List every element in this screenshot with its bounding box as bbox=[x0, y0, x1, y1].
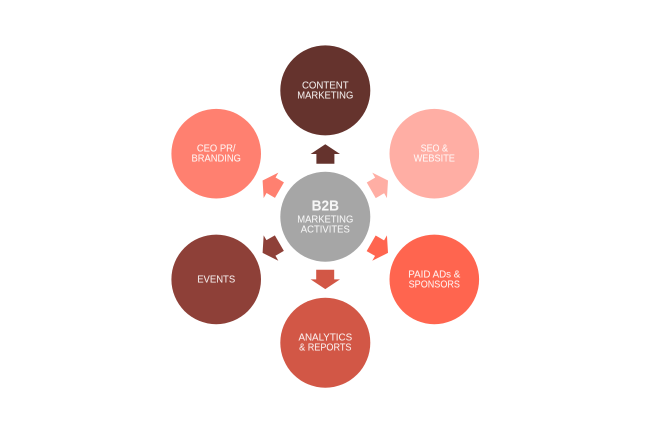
circle: central hub: ACTIVITES bbox=[301, 225, 350, 236]
circle: events bbox=[171, 235, 261, 324]
arrow: to paid ads bbox=[364, 230, 395, 266]
arrow: to SEO and website bbox=[364, 168, 395, 203]
circle: SEO and website: WEBSITE bbox=[414, 154, 455, 165]
circle: analytics and reports: & REPORTS bbox=[299, 342, 352, 353]
circle: central hub bbox=[280, 172, 370, 262]
arrow: to content marketing bbox=[311, 144, 340, 164]
circle: central hub: B2B bbox=[312, 198, 339, 214]
circle: central hub: MARKETING bbox=[297, 215, 354, 226]
circle: CEO PR and branding: CEO PR/ bbox=[197, 144, 236, 155]
circle: content marketing bbox=[280, 45, 370, 135]
arrow: to CEO PR bbox=[255, 168, 287, 203]
circle: analytics and reports: ANALYTICS bbox=[298, 332, 352, 343]
circle: content marketing: MARKETING bbox=[297, 91, 354, 102]
arrow: to events bbox=[255, 230, 287, 266]
arrow: to analytics bbox=[311, 270, 340, 289]
circle: CEO PR and branding bbox=[171, 109, 261, 198]
circle: events: EVENTS bbox=[197, 275, 236, 286]
circle: SEO and website bbox=[390, 109, 479, 198]
circle: content marketing: CONTENT bbox=[302, 81, 349, 92]
circle: paid ads and sponsors bbox=[390, 235, 479, 324]
circle: paid ads and sponsors: PAID ADs & bbox=[408, 269, 461, 280]
circle: analytics and reports bbox=[280, 298, 370, 388]
circle: CEO PR and branding: BRANDING bbox=[192, 154, 241, 165]
circle: SEO and website: SEO & bbox=[421, 144, 448, 155]
circle: paid ads and sponsors: SPONSORS bbox=[409, 279, 460, 290]
